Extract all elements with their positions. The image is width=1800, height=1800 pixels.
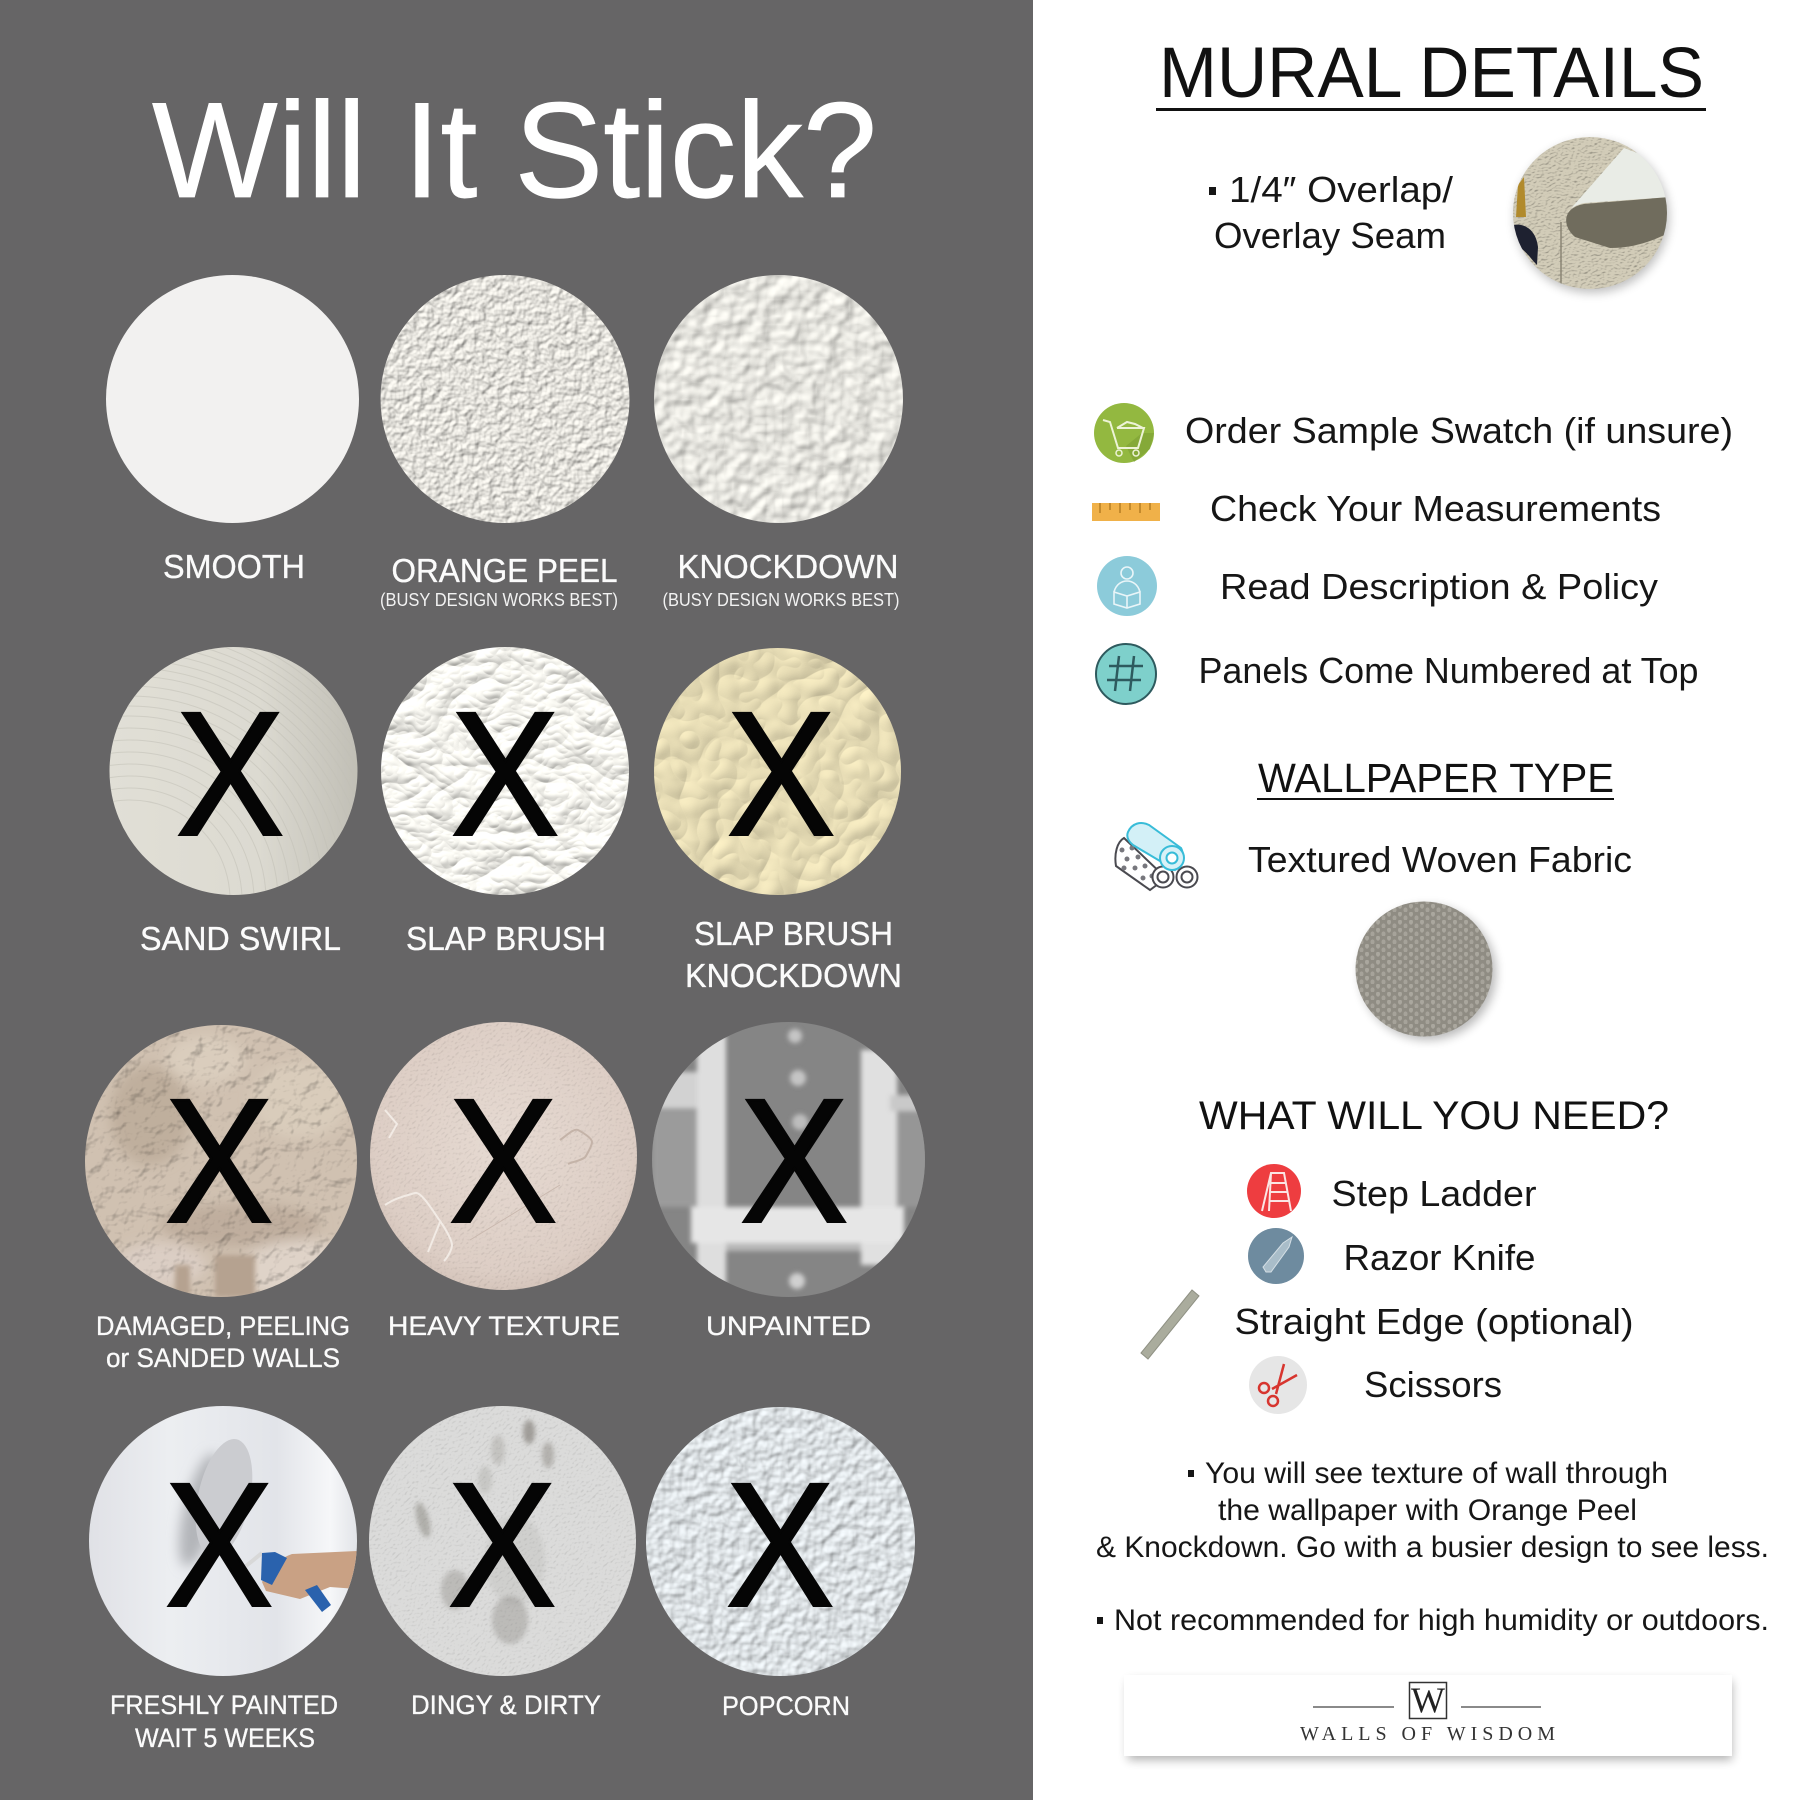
row: panels numbered: Panels Come Numbered at Top — [1198, 650, 1698, 691]
swatch: orange peel: ORANGE PEEL — [392, 552, 618, 589]
swatch: unpainted: UNPAINTED — [706, 1311, 871, 1341]
icon: wallpaper rolls — [1115, 823, 1198, 890]
row: order sample swatch — [1094, 403, 1733, 463]
x mark: X — [452, 676, 559, 872]
swatch: dingy and dirty — [368, 1406, 637, 1720]
x mark: X — [166, 1064, 273, 1260]
text: overlap seam: Overlay Seam — [1214, 215, 1446, 256]
image: overlap seam circle — [1513, 137, 1670, 293]
swatch: heavy texture — [370, 1022, 637, 1341]
swatch: freshly painted — [89, 1406, 357, 1753]
text: overlap seam — [1209, 169, 1453, 256]
heading: what will you need: WHAT WILL YOU NEED? — [1199, 1094, 1669, 1138]
swatch: slap brush knockdown — [654, 648, 902, 994]
swatch: slap brush: SLAP BRUSH — [406, 920, 606, 957]
x mark: X — [177, 676, 284, 872]
x mark: X — [728, 676, 835, 872]
icon: straight edge — [1141, 1290, 1199, 1359]
x mark: X — [166, 1448, 273, 1644]
swatch: damaged peeling: DAMAGED, PEELING — [96, 1311, 350, 1341]
heading: mural details: MURAL DETAILS — [1159, 34, 1704, 113]
row: order sample swatch: Order Sample Swatch (if unsure) — [1185, 410, 1733, 451]
note: texture visibility — [1096, 1457, 1769, 1564]
row: read description — [1097, 556, 1658, 616]
swatch: knockdown: (BUSY DESIGN WORKS BEST) — [662, 590, 900, 610]
swatch: heavy texture: HEAVY TEXTURE — [388, 1311, 620, 1341]
swatch: slap brush knockdown: SLAP BRUSH — [694, 915, 893, 952]
row: straight edge: Straight Edge (optional) — [1234, 1301, 1634, 1342]
note: humidity: Not recommended for high humidity or outdoors. — [1114, 1604, 1769, 1637]
swatch: knockdown — [654, 275, 904, 610]
swatch: sand swirl: SAND SWIRL — [140, 920, 341, 957]
icon: ladder — [1247, 1164, 1301, 1218]
heading: wallpaper type: WALLPAPER TYPE — [1258, 755, 1614, 801]
logo: walls of wisdom: WALLS OF WISDOM — [1300, 1723, 1555, 1745]
row: razor knife: Razor Knife — [1344, 1237, 1536, 1278]
note: texture visibility: & Knockdown. Go with a busier design to see less. — [1096, 1531, 1769, 1564]
swatch: knockdown: KNOCKDOWN — [678, 548, 898, 585]
swatch: sand swirl — [110, 647, 358, 950]
swatch: smooth: SMOOTH — [163, 548, 305, 585]
row: straight edge — [1141, 1290, 1634, 1359]
row: read description: Read Description & Policy — [1220, 566, 1658, 607]
note: texture visibility: You will see texture of wall through — [1205, 1457, 1668, 1490]
swatch: dingy and dirty: DINGY & DIRTY — [411, 1690, 601, 1720]
row: scissors: Scissors — [1364, 1364, 1502, 1405]
swatch: slap brush — [381, 647, 629, 957]
logo: walls of wisdom: W — [1411, 1680, 1445, 1720]
swatch: damaged peeling — [85, 1025, 360, 1373]
swatch: freshly painted: FRESHLY PAINTED — [110, 1690, 338, 1720]
panel: mural details — [1092, 34, 1769, 1760]
panel: will it stick — [0, 0, 1033, 1800]
note: texture visibility: the wallpaper with Orange Peel — [1218, 1494, 1637, 1527]
icon: ruler — [1092, 503, 1160, 521]
swatch: orange peel — [380, 275, 630, 610]
x mark: X — [449, 1448, 556, 1644]
row: step ladder: Step Ladder — [1332, 1173, 1537, 1214]
row: razor knife — [1248, 1228, 1536, 1284]
row: step ladder — [1247, 1164, 1537, 1218]
icon: reader — [1097, 556, 1157, 616]
title: Will It Stick? — [152, 74, 877, 226]
row: panels numbered — [1096, 644, 1698, 704]
icon: hash — [1096, 644, 1156, 704]
swatch: smooth — [106, 275, 359, 585]
swatch: popcorn: POPCORN — [722, 1691, 850, 1721]
x mark: X — [741, 1064, 848, 1260]
swatch: damaged peeling: or SANDED WALLS — [106, 1343, 340, 1373]
icon: scissors — [1249, 1356, 1307, 1414]
swatch: slap brush knockdown: KNOCKDOWN — [685, 957, 902, 994]
icon: knife — [1248, 1228, 1304, 1284]
x mark: X — [450, 1064, 557, 1260]
image: fabric swatch — [1355, 901, 1496, 1040]
text: overlap seam: 1/4″ Overlap/ — [1229, 169, 1453, 210]
swatch: popcorn — [646, 1407, 915, 1721]
swatch: freshly painted: WAIT 5 WEEKS — [135, 1723, 315, 1753]
swatch: unpainted — [652, 1022, 928, 1341]
icon: cart — [1094, 403, 1154, 463]
text: textured woven fabric: Textured Woven Fabric — [1248, 839, 1632, 880]
row: check measurements: Check Your Measurements — [1210, 488, 1661, 529]
swatch: orange peel: (BUSY DESIGN WORKS BEST) — [380, 590, 618, 610]
row: scissors — [1249, 1356, 1502, 1414]
logo: walls of wisdom — [1124, 1675, 1732, 1760]
x mark: X — [727, 1448, 834, 1644]
